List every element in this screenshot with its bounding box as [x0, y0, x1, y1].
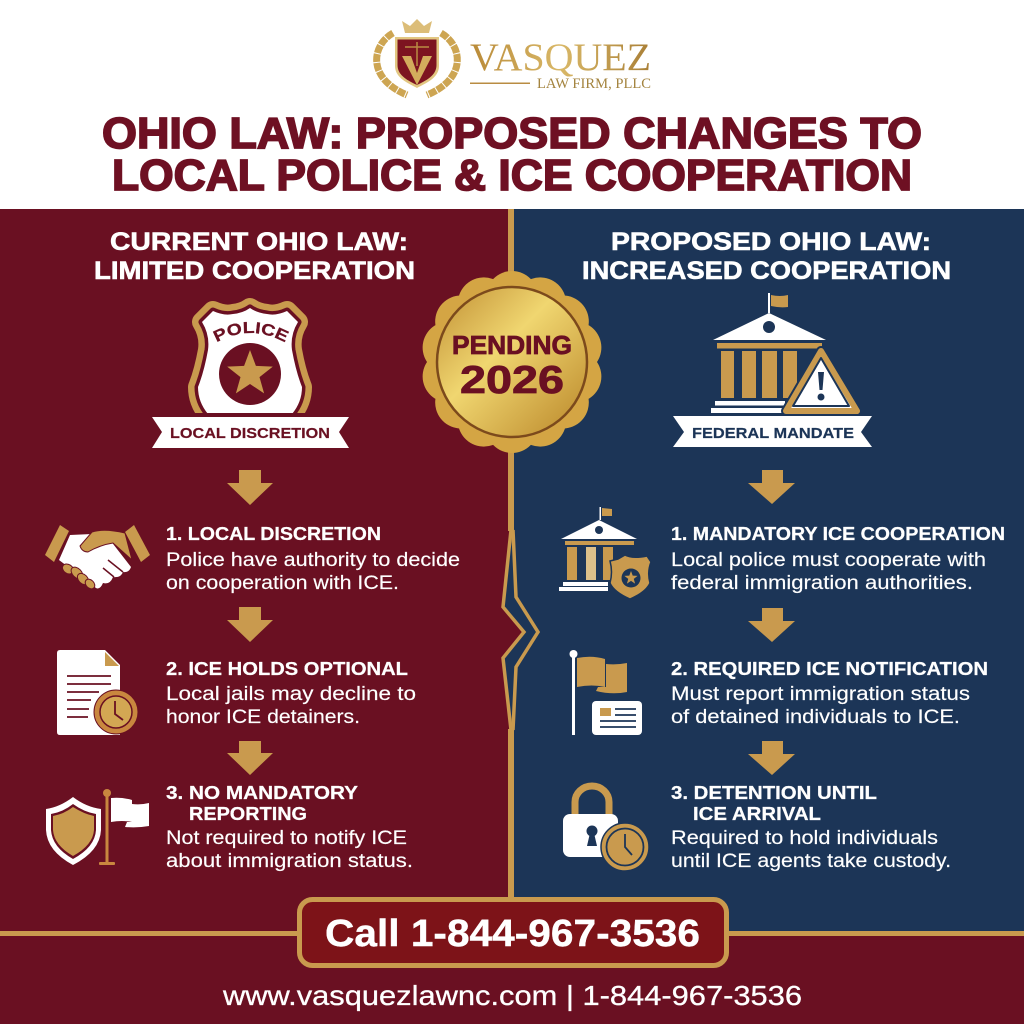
- item text: Local police must cooperate with: [671, 550, 986, 571]
- logo subtitle: LAW FIRM, PLLC: [537, 76, 651, 92]
- item text: [166, 658, 416, 728]
- medal: pending 2026: [417, 269, 607, 455]
- medal: pending 2026: PENDING: [452, 330, 572, 360]
- item text: 2. ICE HOLDS OPTIONAL: [166, 658, 408, 679]
- item text: [671, 523, 1005, 594]
- right heading: PROPOSED OHIO LAW:: [611, 228, 931, 256]
- center divider: [498, 209, 538, 899]
- right heading: [582, 228, 951, 285]
- panel: proposed Ohio law: [510, 209, 1024, 933]
- arrow: [227, 741, 273, 775]
- item: mandatory ICE cooperation: [559, 507, 1005, 599]
- item: no mandatory reporting: [46, 782, 413, 872]
- icon: shield and flag: [46, 789, 149, 865]
- item text: about immigration status.: [166, 851, 413, 872]
- panel: current Ohio law: [0, 209, 508, 931]
- arrow: [227, 470, 273, 505]
- arrow: [748, 741, 795, 775]
- item text: 1. MANDATORY ICE COOPERATION: [671, 523, 1005, 544]
- item text: REPORTING: [189, 803, 307, 824]
- icon: flag and ID card: [570, 650, 642, 735]
- logo wordmark: VASQUEZ: [470, 36, 651, 79]
- icon: courthouse with badge: [559, 507, 651, 599]
- item text: [166, 782, 413, 872]
- title: LOCAL POLICE & ICE COOPERATION: [112, 151, 912, 200]
- item text: [671, 782, 951, 872]
- item text: Police have authority to decide: [166, 550, 460, 571]
- ribbon: local discretion: [152, 417, 349, 448]
- ribbon: local discretion: LOCAL DISCRETION: [170, 425, 330, 442]
- item text: [671, 658, 988, 728]
- icon: police badge: [188, 298, 312, 413]
- item text: [166, 523, 460, 594]
- title: OHIO LAW: PROPOSED CHANGES TO: [102, 109, 922, 158]
- title: [102, 109, 922, 200]
- item: required ICE notification: [570, 650, 988, 735]
- logo: [377, 19, 651, 95]
- item text: Not required to notify ICE: [166, 828, 407, 849]
- ribbon: federal mandate: [673, 416, 872, 447]
- logo wreath: [377, 33, 457, 95]
- icon: padlock with clock: [563, 786, 649, 871]
- call button: [300, 900, 726, 966]
- arrow: [227, 607, 273, 642]
- call button: Call 1-844-967-3536: [325, 913, 700, 955]
- item text: until ICE agents take custody.: [671, 851, 951, 872]
- item text: Must report immigration status: [671, 684, 970, 705]
- left heading: LIMITED COOPERATION: [94, 257, 415, 285]
- item text: of detained individuals to ICE.: [671, 707, 960, 728]
- item text: on cooperation with ICE.: [166, 573, 399, 594]
- right heading: INCREASED COOPERATION: [582, 257, 951, 285]
- arrow: [748, 608, 795, 642]
- item text: 3. DETENTION UNTIL: [671, 782, 877, 803]
- logo shield: [395, 37, 439, 88]
- item: ICE holds optional: [57, 650, 416, 735]
- icon: handshake: [45, 525, 150, 591]
- item text: Required to hold individuals: [671, 828, 938, 849]
- item: detention until ICE arrival: [563, 782, 951, 872]
- item text: 2. REQUIRED ICE NOTIFICATION: [671, 658, 988, 679]
- item text: Local jails may decline to: [166, 684, 416, 705]
- left heading: [94, 228, 415, 285]
- ribbon: federal mandate: FEDERAL MANDATE: [692, 425, 854, 442]
- icon: police badge: POLICE: [212, 322, 289, 342]
- left heading: CURRENT OHIO LAW:: [110, 228, 408, 256]
- item text: 3. NO MANDATORY: [166, 782, 359, 803]
- footer contact line: www.vasquezlawnc.com | 1-844-967-3536: [222, 980, 802, 1011]
- item text: federal immigration authorities.: [671, 573, 973, 594]
- item text: ICE ARRIVAL: [693, 803, 821, 824]
- medal: pending 2026: 2026: [460, 359, 564, 402]
- item text: 1. LOCAL DISCRETION: [166, 523, 381, 544]
- header panel: [0, 0, 1024, 209]
- item text: honor ICE detainers.: [166, 707, 360, 728]
- icon: courthouse with warning: [711, 293, 857, 413]
- arrow: [748, 470, 795, 504]
- footer band: [0, 900, 1024, 1024]
- icon: document with clock: [57, 650, 138, 735]
- item: local discretion: [45, 523, 460, 594]
- logo crown: [402, 19, 432, 33]
